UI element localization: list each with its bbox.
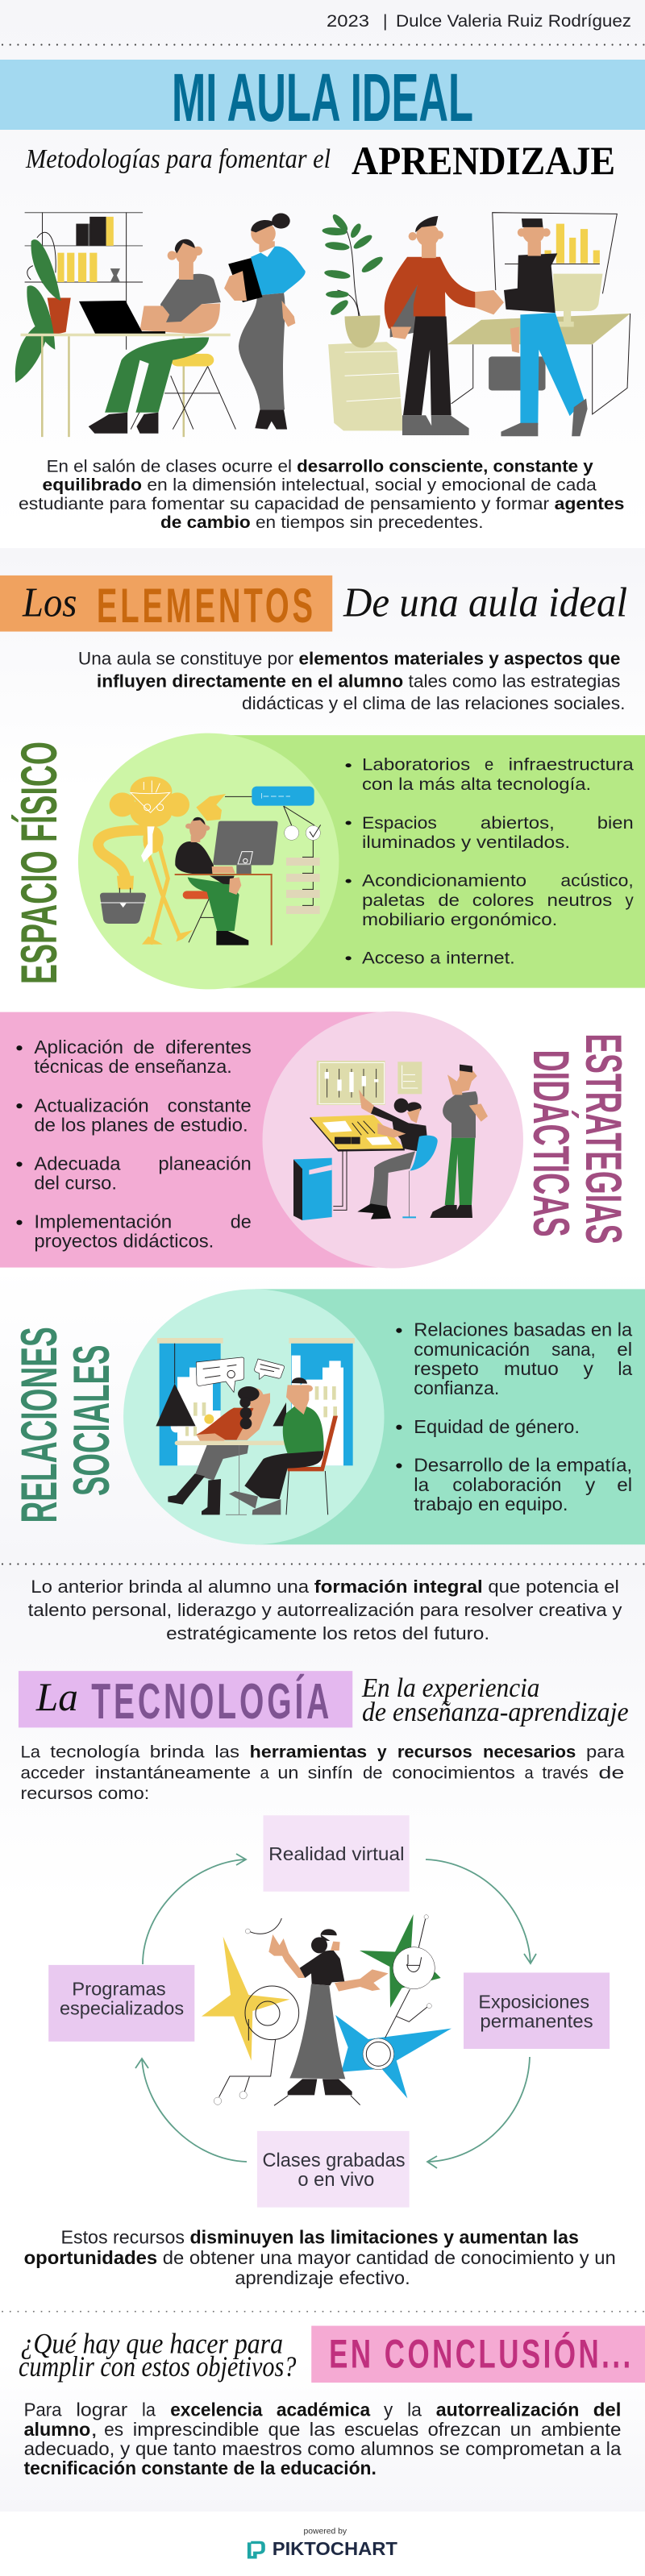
heading: la tecnologia: En la experiencia: [361, 1672, 539, 1702]
subtitle: APRENDIZAJE: [352, 138, 615, 183]
heading: los elementos: Los: [22, 579, 77, 625]
list: relaciones: la: [414, 1474, 429, 1495]
list: espacio fisico: colores: [472, 890, 534, 910]
list: espacio fisico: Espacios: [362, 813, 437, 833]
list: relaciones: el: [617, 1339, 632, 1361]
paragraph: herramientas: brinda: [150, 1743, 205, 1762]
illustration: office scene: [15, 213, 630, 437]
list: relaciones: trabajo en equipo.: [414, 1494, 568, 1514]
briefcase: [100, 888, 146, 924]
paragraph: herramientas: recursos como:: [21, 1785, 149, 1803]
list: relaciones: comunicación: [414, 1339, 530, 1361]
list: estrategias: diferentes: [165, 1037, 252, 1058]
stars: [202, 1914, 452, 2098]
paragraph: conclusion: alumno: [24, 2419, 90, 2440]
list: estrategias: constante: [168, 1095, 252, 1116]
cabinet: [328, 315, 403, 430]
arrows: cycle: [135, 1854, 536, 2168]
drafting desk: [310, 1115, 405, 1152]
control panel on wall: [317, 1061, 422, 1105]
section: estrategias and relaciones: [0, 1012, 645, 1544]
paragraph: herramientas: para: [586, 1743, 625, 1762]
heading: estrategias didacticas: DIDÁCTICAS: [522, 1049, 580, 1237]
windows with city: [157, 1338, 355, 1465]
woman with tablet: [224, 214, 306, 430]
seated person: [175, 817, 248, 945]
panel: relaciones band: [255, 1289, 645, 1544]
paragraph: conclusion: y: [384, 2399, 393, 2420]
box: programas especializados: especializados: [60, 1998, 184, 2019]
heading: pregunta: [19, 2328, 296, 2383]
list: estrategias: Aplicación: [34, 1037, 123, 1058]
intro paragraph: equilibrado en la dimensión intelectual, social y emocional de cada: [43, 476, 597, 495]
list: estrategias: planeación: [158, 1153, 252, 1174]
list: espacio fisico: Acondicionamiento: [362, 870, 526, 890]
intro text: [78, 648, 626, 713]
paragraph: conclusion: que: [268, 2419, 300, 2440]
paragraph: herramientas: un: [277, 1764, 298, 1783]
box: clases grabadas: o en vivo: [298, 2168, 374, 2191]
woman: [268, 1929, 389, 2095]
paragraph: conclusion: ,: [90, 2419, 98, 2440]
paragraph: conclusion: excelencia: [170, 2399, 263, 2420]
panel: relaciones circle: [123, 1289, 385, 1544]
woman: [168, 1386, 270, 1514]
briefcase: [489, 356, 546, 390]
illustration: relaciones: [156, 1338, 355, 1514]
paragraph: conclusion: ofrezcan: [428, 2419, 501, 2440]
plant middle: [322, 213, 385, 318]
speech bubbles: [196, 1357, 285, 1392]
paragraph: herramientas: recursos: [397, 1743, 472, 1762]
list: espacio fisico: de: [438, 890, 460, 910]
list: relaciones: [396, 1319, 632, 1514]
section: elementos: [0, 575, 645, 989]
paragraph: formacion integral: [28, 1577, 622, 1644]
heading: espacio fisico: ESPACIO FÍSICO: [11, 742, 68, 984]
section: tecnologia: [19, 1577, 629, 2049]
author line: Dulce Valeria Ruiz Rodríguez: [396, 12, 631, 31]
paragraph: conclusion: la: [407, 2399, 422, 2420]
paragraph: herramientas: [21, 1743, 625, 1803]
paragraph: conclusion: un: [510, 2419, 531, 2440]
author line: |: [383, 12, 387, 31]
heading: relaciones sociales: RELACIONES: [12, 1327, 68, 1523]
intro paragraph: [19, 457, 624, 532]
list: relaciones: colaboración: [452, 1474, 561, 1495]
list: estrategias: técnicas de enseñanza.: [34, 1057, 232, 1078]
paragraph: conclusion: tecnificación constante de la educación.: [24, 2458, 377, 2478]
paragraph: conclusion: académica: [277, 2399, 371, 2420]
desk line: [175, 875, 272, 945]
paragraph: conclusion: ambiente: [541, 2419, 621, 2440]
list: espacio fisico: mobiliario ergonómico.: [362, 909, 557, 929]
list: relaciones: Equidad de género.: [414, 1416, 580, 1437]
list: espacio fisico: bien: [597, 813, 634, 833]
yellow giant figure: [98, 776, 226, 945]
lamps: [156, 1344, 286, 1432]
list: estrategias: [16, 1037, 252, 1252]
chair: [402, 1171, 416, 1218]
seated man: [89, 239, 221, 434]
standing man: [430, 1065, 488, 1218]
subtitle: [25, 138, 615, 183]
list: estrategias: de los planes de estudio.: [34, 1115, 248, 1136]
illustration: estrategias: [293, 1061, 488, 1220]
desk right: [447, 314, 630, 414]
panel: estrategias band: [0, 1012, 395, 1268]
box: exposiciones permanentes: permanentes: [480, 2011, 593, 2032]
paragraph: herramientas: acceder: [21, 1764, 85, 1783]
list: relaciones: y: [583, 1359, 593, 1380]
table: [175, 1441, 297, 1514]
box: realidad virtual: [264, 1815, 410, 1892]
panel: espacio fisico circle: [78, 733, 339, 989]
list: espacio fisico: Acceso a internet.: [362, 948, 515, 968]
paragraph: herramientas: tecnología: [50, 1743, 140, 1762]
heading: pregunta: ¿Qué hay que hacer para: [21, 2328, 283, 2360]
desk: [41, 336, 185, 437]
man: [229, 1377, 324, 1514]
intro paragraph: de cambio en tiempos sin precedentes.: [160, 513, 483, 532]
bubble and checklist: [225, 787, 321, 914]
paragraph: herramientas: La: [21, 1743, 41, 1762]
paragraph: herramientas: de: [363, 1764, 382, 1783]
laptop: [79, 301, 165, 334]
panel: estrategias circle: [263, 1012, 523, 1268]
chair: [183, 891, 226, 942]
list: relaciones: confianza.: [414, 1378, 499, 1399]
illustration: virtual reality woman: [202, 1914, 452, 2105]
list: espacio fisico: paletas: [362, 890, 425, 910]
paragraph: herramientas: instantáneamente: [95, 1764, 251, 1783]
list: relaciones: el: [617, 1474, 632, 1495]
paragraph: herramientas: través: [542, 1764, 589, 1783]
section: conclusion: [2, 2131, 645, 2559]
cabinet: [293, 1151, 347, 1220]
paragraph: herramientas: las: [214, 1743, 239, 1762]
subtitle: Metodologías para fomentar el: [25, 144, 331, 174]
faces and wires: [214, 1915, 435, 2105]
heading: la tecnologia: La: [35, 1674, 78, 1719]
heading: la tecnologia: TECNOLOGÍA: [91, 1673, 332, 1730]
list: relaciones: mutuo: [504, 1359, 559, 1380]
list: estrategias: del curso.: [34, 1173, 117, 1194]
panel: espacio fisico band: [206, 735, 645, 988]
paragraph: herramientas: sinfín: [308, 1764, 353, 1783]
heading: los elementos: ELEMENTOS: [97, 579, 316, 633]
list: relaciones: la: [618, 1359, 632, 1380]
paragraph: formacion integral: Lo anterior brinda al alumno una formación integral que potencia el: [31, 1577, 619, 1597]
paragraph: conclusion: [24, 2399, 622, 2478]
paragraph: formacion integral: estratégicamente los retos del futuro.: [166, 1624, 489, 1644]
list: estrategias: de: [231, 1211, 252, 1232]
paragraph: herramientas: herramientas: [250, 1743, 367, 1762]
box: realidad virtual: Realidad virtual: [268, 1844, 405, 1864]
footer: piktochart: powered by: [304, 2526, 347, 2536]
heading: estrategias didacticas: ESTRATEGIAS: [575, 1033, 630, 1244]
list: espacio fisico: neutros: [547, 890, 612, 910]
list: espacio fisico: y: [626, 890, 634, 910]
list: estrategias: Adecuada: [34, 1153, 121, 1174]
list: estrategias: de: [133, 1037, 155, 1058]
paragraph: herramientas: de: [598, 1764, 624, 1783]
heading: pregunta: cumplir con estos objetivos?: [19, 2351, 296, 2383]
plant left: [15, 239, 71, 383]
box: clases grabadas: [257, 2131, 410, 2208]
list: relaciones: respeto: [414, 1359, 479, 1380]
box: programas especializados: Programas: [72, 1979, 166, 2000]
chart and monitor: [493, 213, 617, 327]
paragraph: herramientas: conocimientos: [392, 1764, 515, 1783]
paragraph: herramientas: necesarios: [483, 1743, 576, 1762]
paragraph: conclusion: las: [310, 2419, 335, 2440]
paragraph: herramientas: y: [377, 1743, 387, 1762]
list: espacio fisico: abiertos,: [481, 813, 555, 833]
list: espacio fisico: iluminados y ventilados.: [362, 833, 570, 852]
list: espacio fisico: [346, 754, 634, 968]
list: estrategias: Implementación: [34, 1211, 172, 1232]
man in red: [385, 216, 504, 435]
footer: piktochart: [249, 2526, 397, 2559]
shelves: [25, 213, 143, 350]
paragraph: conclusion: la: [142, 2399, 156, 2420]
heading: relaciones sociales: SOCIALES: [64, 1345, 120, 1496]
paragraph: conclusion: es: [104, 2419, 123, 2440]
paragraph: conclusion: lograr: [76, 2399, 127, 2420]
heading: estrategias didacticas: [522, 1033, 630, 1244]
box: exposiciones permanentes: Exposiciones: [478, 1992, 589, 2013]
list: estrategias: proyectos didácticos.: [34, 1231, 214, 1252]
illustration: espacio fisico: [98, 776, 321, 945]
paragraph: conclusion: autorrealización: [436, 2399, 579, 2420]
intro paragraph: estudiante para fomentar su capacidad de pensamiento y formar agentes: [19, 495, 624, 513]
list: relaciones: sana,: [551, 1339, 596, 1361]
box: programas especializados: [48, 1965, 194, 2042]
paragraph: recursos: aprendizaje efectivo.: [235, 2267, 410, 2289]
chair: [286, 1416, 338, 1514]
woman: [357, 1090, 438, 1219]
list: espacio fisico: e: [485, 754, 493, 775]
author line: 2023: [327, 12, 369, 31]
list: estrategias: Actualización: [34, 1095, 149, 1116]
paragraph: conclusion: Para: [24, 2399, 62, 2420]
man in black: [501, 218, 588, 436]
paragraph: conclusion: escuelas: [344, 2419, 418, 2440]
list: relaciones: y: [585, 1474, 596, 1495]
list: espacio fisico: Laboratorios: [362, 754, 470, 775]
paragraph: conclusion: del: [593, 2399, 621, 2420]
monitor: [213, 821, 278, 874]
box: clases grabadas: Clases grabadas: [263, 2149, 406, 2171]
paragraph: herramientas: a: [260, 1764, 269, 1783]
box: exposiciones permanentes: [464, 1972, 610, 2049]
stool: [131, 354, 235, 430]
intro paragraph: En el salón de clases ocurre el desarrollo consciente, constante y: [47, 457, 594, 476]
heading: relaciones sociales: [12, 1327, 120, 1523]
paragraph: recursos: [24, 2227, 616, 2289]
paragraph: conclusion: imprescindible: [133, 2419, 259, 2440]
footer: piktochart: PIKTOCHART: [273, 2538, 397, 2559]
paragraph: herramientas: a: [525, 1764, 534, 1783]
